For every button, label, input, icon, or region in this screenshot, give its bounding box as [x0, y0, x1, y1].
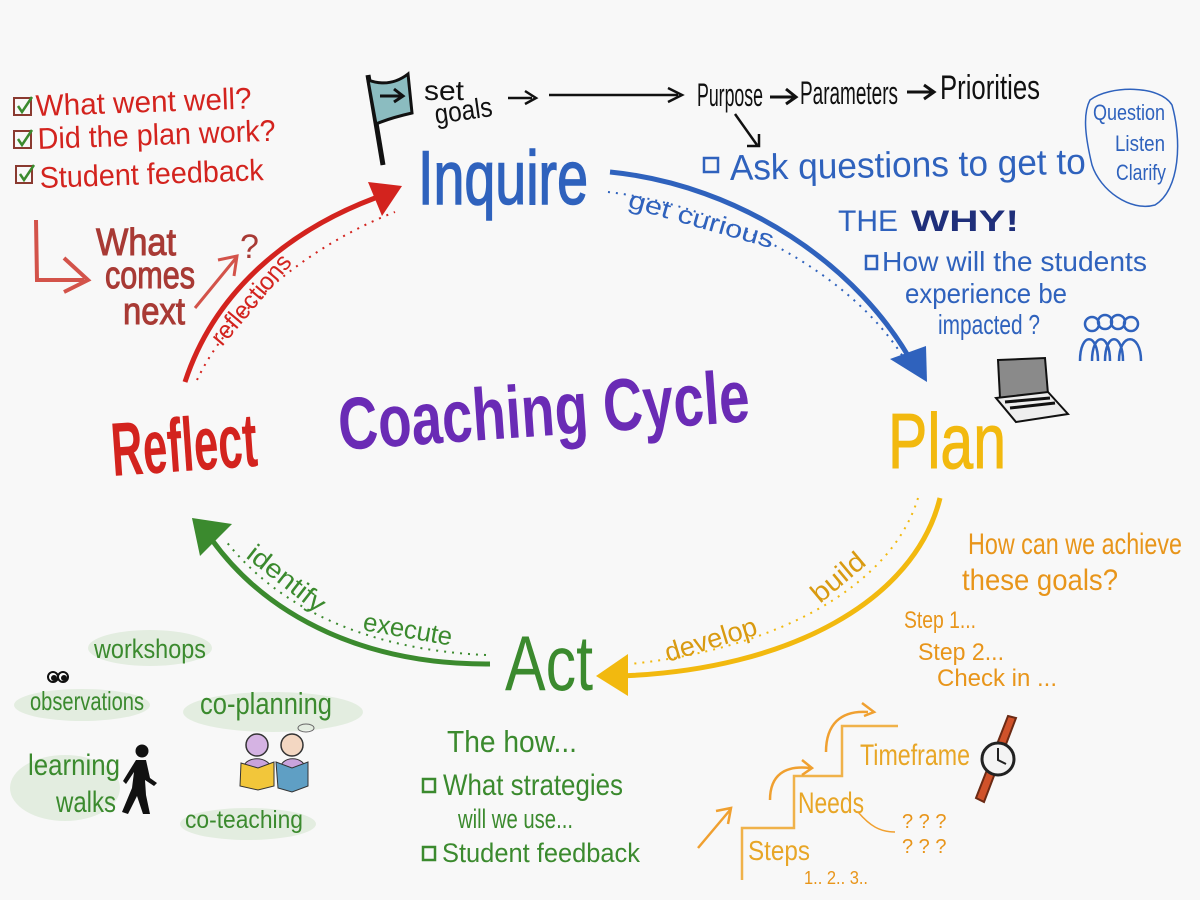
- staircase diagram: Timeframe: [860, 739, 970, 772]
- text: the how list: Student feedback: [442, 838, 640, 868]
- text: the how list: The how...: [447, 724, 577, 759]
- callout: question listen clarify: Listen: [1115, 131, 1165, 156]
- arrow label: develop build: develop: [661, 611, 761, 668]
- staircase diagram: 1.. 2.. 3..: [804, 868, 868, 888]
- icon: wrist watch: [976, 716, 1016, 802]
- icon: group of students: [1080, 315, 1141, 361]
- act activities cluster: learning: [28, 749, 120, 782]
- stage: Act: Act: [505, 619, 593, 707]
- text: the why: WHY!: [911, 205, 1019, 238]
- text: the why: [838, 205, 1019, 238]
- text: the how list: What strategies: [443, 769, 623, 802]
- arrow: Inquire to Plan: [608, 172, 927, 382]
- checklist: reflect questions: Student feedback: [39, 154, 265, 195]
- text: ask questions: Ask questions to get to: [729, 141, 1086, 188]
- text: what comes next: ?: [240, 228, 259, 266]
- arrow: Reflect to Inquire: [185, 182, 402, 382]
- stage: Plan: Plan: [888, 397, 1006, 485]
- staircase diagram: ? ? ?: [902, 811, 946, 833]
- text: what comes next: comes: [105, 255, 195, 297]
- arrow label: reflections: reflections: [205, 249, 297, 351]
- arrow: Plan to Act: [596, 498, 940, 696]
- icon: walking person: [122, 744, 157, 814]
- text: steps list: Check in ...: [937, 665, 1057, 692]
- checklist: reflect questions: [14, 82, 276, 195]
- staircase diagram: Steps: [748, 835, 810, 866]
- title: Coaching Cycle: Coaching Cycle: [335, 354, 752, 466]
- checklist: reflect questions: Did the plan work?: [37, 115, 276, 156]
- text: how can we achieve: these goals?: [962, 564, 1118, 597]
- text: student experience question: impacted ?: [938, 309, 1040, 340]
- text: the how list: [423, 724, 640, 868]
- text: set goals: set: [424, 75, 464, 106]
- arrow label: develop build: build: [805, 546, 871, 609]
- text: what comes next: next: [123, 291, 185, 333]
- act activities cluster: co-planning: [200, 686, 332, 721]
- arrows and labels: purpose flow: Parameters: [800, 75, 898, 111]
- arrow label: identify execute: identify: [241, 538, 332, 618]
- callout: question listen clarify: Question: [1093, 100, 1165, 125]
- icon: eyes: [48, 672, 68, 682]
- arrow label: develop build: [661, 546, 871, 668]
- text: steps list: Step 2...: [918, 639, 1004, 666]
- act activities cluster: [10, 630, 363, 840]
- text: how can we achieve: [962, 528, 1182, 597]
- text: what comes next: [36, 220, 259, 333]
- arrows and labels: purpose flow: [508, 69, 1040, 146]
- act activities cluster: walks: [55, 786, 116, 819]
- text: student experience question: [866, 246, 1147, 340]
- text: student experience question: How will the students: [882, 246, 1147, 277]
- act activities cluster: co-teaching: [185, 806, 303, 834]
- text: set goals: [424, 75, 494, 130]
- text: the why: THE: [838, 205, 898, 238]
- staircase diagram: Needs: [798, 787, 864, 820]
- arrow label: get curious: get curious: [625, 186, 777, 254]
- arrow label: identify execute: [241, 538, 455, 652]
- callout: question listen clarify: Clarify: [1116, 160, 1166, 185]
- staircase diagram: ? ? ?: [902, 836, 946, 858]
- act activities cluster: observations: [30, 686, 144, 716]
- arrow label: identify execute: execute: [361, 606, 455, 652]
- icon: laptop: [996, 358, 1068, 422]
- checklist: reflect questions: What went well?: [35, 82, 252, 123]
- text: student experience question: experience be: [905, 278, 1067, 309]
- stage: Reflect: Reflect: [108, 398, 260, 493]
- act activities cluster: workshops: [93, 634, 206, 664]
- staircase diagram: [698, 703, 970, 888]
- arrows and labels: purpose flow: Priorities: [940, 69, 1040, 107]
- callout: question listen clarify: [1086, 89, 1178, 206]
- arrow: Act to Reflect: [192, 518, 490, 664]
- stage: Inquire: Inquire: [418, 136, 588, 221]
- text: steps list: [904, 607, 1057, 692]
- icon: flag: [368, 74, 412, 165]
- text: what comes next: What: [96, 222, 176, 264]
- text: the how list: will we use...: [457, 804, 573, 834]
- text: steps list: Step 1...: [904, 607, 976, 634]
- text: set goals: goals: [433, 91, 494, 130]
- icon: two people with books: [240, 724, 314, 792]
- arrows and labels: purpose flow: Purpose: [697, 77, 763, 113]
